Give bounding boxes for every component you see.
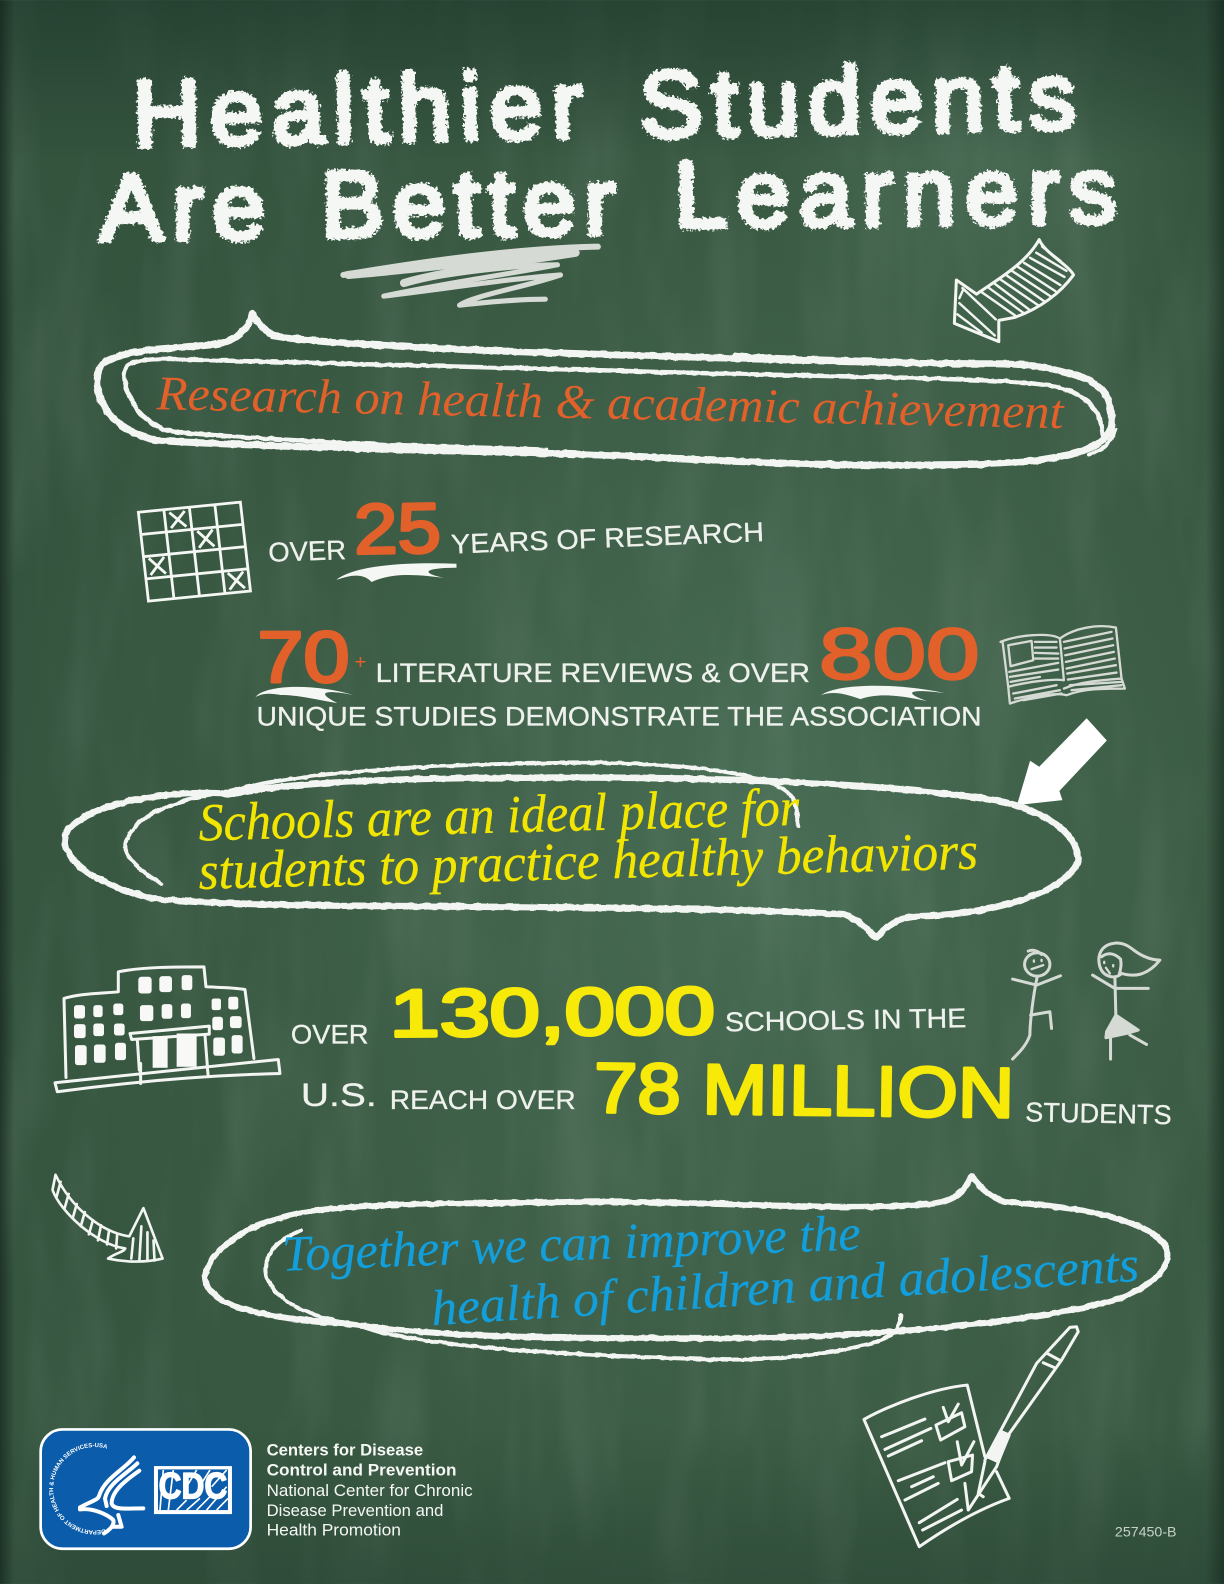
- number 130,000: 130,000: [389, 975, 715, 1051]
- icon: girl figure: [1093, 943, 1160, 1059]
- publication number: 257450-B: [1115, 1523, 1177, 1539]
- years of research label: YEARS OF RESEARCH: [450, 516, 764, 560]
- number 70: 70: [258, 617, 349, 698]
- title: Learners: [674, 138, 1117, 248]
- literature reviews label: LITERATURE REVIEWS & OVER: [376, 657, 810, 688]
- panel: 130,000 schools and 78 million students: [55, 943, 1172, 1132]
- icon: open book: [1001, 626, 1125, 704]
- logo: HHS and CDC: [39, 1428, 252, 1550]
- panel: 70+ literature reviews and 800 studies: [256, 614, 1125, 731]
- icon: school building: [55, 967, 280, 1092]
- icon: boy figure: [1013, 950, 1061, 1059]
- panel: schools callout bubble: [65, 763, 1079, 937]
- reach over label: REACH OVER: [390, 1084, 576, 1115]
- icon: checklist and pen: [864, 1327, 1078, 1547]
- icon: calendar: [138, 502, 250, 601]
- HHS eagle: [80, 1457, 143, 1533]
- title: Healthier: [132, 52, 584, 168]
- icon: striped arrow top right: [954, 240, 1074, 342]
- bubble text: students to practice healthy behaviors: [198, 821, 979, 901]
- organization text: Control and Prevention: [267, 1461, 456, 1480]
- underline scribble: [336, 563, 456, 582]
- organization text: Health Promotion: [267, 1520, 401, 1539]
- title: Students: [638, 43, 1077, 159]
- over label: OVER: [291, 1018, 369, 1049]
- organization text: Centers for Disease: [267, 1441, 423, 1460]
- bubble text: [198, 777, 979, 901]
- title: [99, 43, 1117, 262]
- bubble text: health of children and adolescents: [429, 1236, 1140, 1336]
- organization text: [267, 1441, 473, 1539]
- bubble outline: [97, 313, 1116, 465]
- schools in the label: SCHOOLS IN THE: [725, 1002, 967, 1037]
- bubble outline: [205, 1176, 1167, 1360]
- title underline scribble: [343, 247, 598, 305]
- students label: STUDENTS: [1025, 1096, 1172, 1130]
- logo panel: [41, 1429, 251, 1549]
- bubble text: [281, 1205, 1140, 1336]
- us label: U.S.: [301, 1077, 377, 1113]
- arrow: solid white: [1017, 718, 1107, 805]
- bubble text: Together we can improve the: [281, 1205, 861, 1282]
- panel: 25 years of research: [138, 488, 764, 601]
- underline scribble 70: [256, 687, 353, 703]
- panel: together callout bubble: [205, 1176, 1167, 1360]
- panel: research callout bubble: [97, 313, 1116, 465]
- arrow: striped curved arrow bottom left: [53, 1175, 163, 1262]
- title: Better: [320, 149, 616, 259]
- bubble text: Research on health & academic achievement: [155, 367, 1066, 439]
- underline scribble 800: [821, 686, 944, 701]
- organization text: National Center for Chronic: [267, 1481, 473, 1500]
- seal text: DEPARTMENT OF HEALTH & HUMAN SERVICES-USA: [49, 1442, 107, 1534]
- number 800: 800: [819, 614, 980, 695]
- over label: OVER: [268, 534, 347, 568]
- plus sign: +: [354, 652, 366, 674]
- studies label: UNIQUE STUDIES DEMONSTRATE THE ASSOCIATION: [257, 700, 982, 731]
- number 25: 25: [353, 488, 442, 569]
- organization text: Disease Prevention and: [267, 1501, 443, 1520]
- number 78 million: 78 MILLION: [594, 1048, 1015, 1132]
- CDC box: CDC: [159, 1465, 227, 1507]
- bubble text: Schools are an ideal place for: [198, 777, 800, 852]
- bubble outline: [65, 763, 1079, 937]
- title: Are: [99, 154, 266, 262]
